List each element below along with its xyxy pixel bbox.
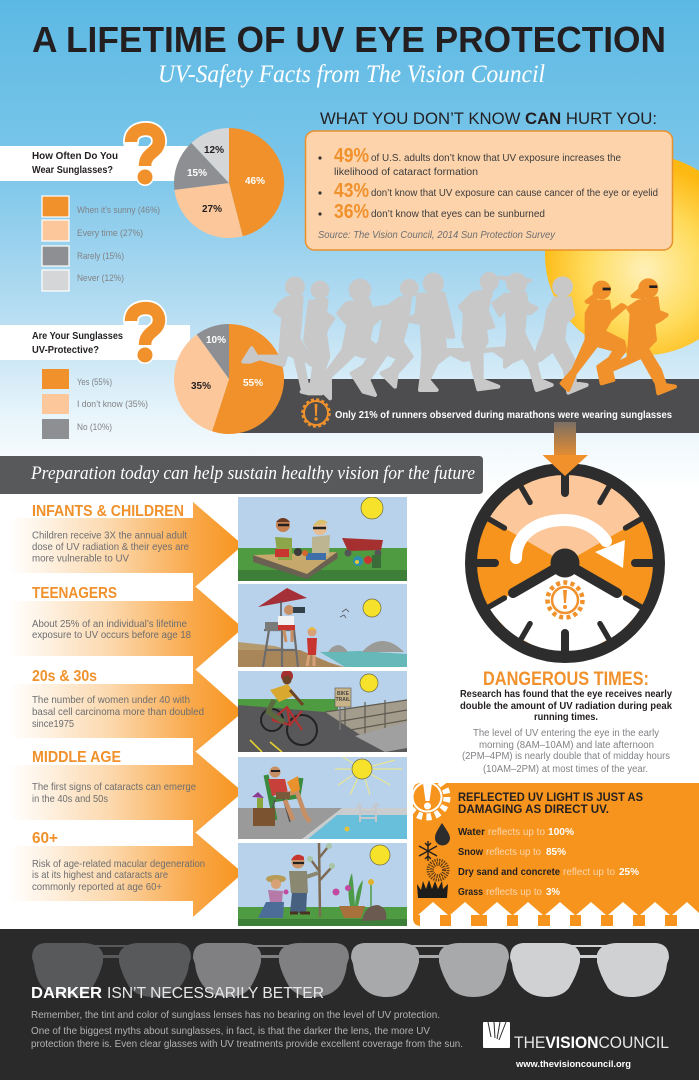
- panel: 20s & 30s: The number of women under 40 with: [32, 694, 190, 706]
- sunglasses row: [32, 943, 669, 997]
- pie chart: how often: 15%: [187, 168, 207, 179]
- up arrows: [418, 902, 699, 926]
- panel: 20s & 30s: basal cell carcinoma more than doubled: [32, 706, 204, 718]
- illustration: cyclist on bike trail: BIKE: [337, 691, 350, 697]
- fact: 49%: of U.S. adults don’t know that UV exposure increases the: [371, 152, 621, 164]
- clock chart: [471, 469, 659, 657]
- illustration: relaxing by pool: [238, 755, 407, 839]
- panel: how often question: Wear Sunglasses?: [32, 165, 113, 176]
- panel: middle age: The first signs of cataracts can emerge: [32, 781, 196, 793]
- panel: teenagers: About 25% of an individual’s lifetime: [32, 618, 187, 630]
- row: snow: 85%: [546, 847, 566, 858]
- panel: UV-protective question: UV-Protective?: [32, 345, 99, 356]
- heading: what you don't know: WHAT YOU DON’T KNOW CAN HURT YOU:: [320, 109, 657, 128]
- panel: teenagers: [0, 585, 243, 670]
- panel: how often question: How Often Do You: [32, 151, 118, 162]
- banner: preparation today: [0, 456, 483, 494]
- legend: how often: Rarely (15%): [77, 251, 124, 262]
- row: dry sand and concrete: reflect up to: [563, 867, 615, 878]
- row: dry sand and concrete: 25%: [619, 867, 639, 878]
- panel: infants & children: [0, 502, 243, 587]
- row: water: [435, 823, 574, 846]
- row: water: reflects up to: [488, 827, 545, 838]
- text: darker body: protection there is. Even clear glasses with UV treatments provide excellent coverage from the sun.: [31, 1039, 463, 1050]
- fact: 43%: don’t know that UV exposure can cause cancer of the eye or eyelid: [371, 187, 658, 199]
- fact: 49%: 49%: [334, 145, 369, 167]
- text: research finding: running times.: [534, 712, 598, 723]
- pie chart: UV-protective: 10%: [206, 335, 226, 346]
- text: level of UV: The level of UV entering the eye in the early: [473, 728, 659, 739]
- panel: 20s & 30s: 20s & 30s: [32, 668, 97, 685]
- text: level of UV: (2PM–4PM) is nearly double that of midday hours: [462, 751, 670, 762]
- icon: question mark: [131, 308, 159, 364]
- pie chart: UV-protective: [174, 324, 284, 434]
- text: darker body: One of the biggest myths about sunglasses, in fact, is that the darker the lens, the more UV: [31, 1026, 430, 1037]
- panel: footer: [0, 929, 699, 1080]
- pie chart: how often: 12%: [204, 145, 224, 156]
- illustration: couple gardening: [238, 843, 407, 926]
- fact: 36%: don’t know that eyes can be sunburned: [371, 208, 545, 220]
- icon: warning burst: [413, 783, 450, 820]
- panel: middle age: MIDDLE AGE: [32, 749, 121, 766]
- row: snow: Snow: [458, 847, 483, 858]
- banner: preparation today: Preparation today can help sustain healthy vision for the future: [30, 463, 475, 484]
- text: research finding: Research has found that the eye receives nearly: [460, 689, 672, 700]
- panel: 20s & 30s: [0, 668, 243, 752]
- heading: dangerous times: DANGEROUS TIMES:: [483, 669, 649, 690]
- pie chart: UV-protective: 55%: [243, 378, 263, 389]
- text: darker body: [31, 1010, 463, 1050]
- panel: survey facts: [306, 131, 672, 250]
- fact: 49%: likelihood of cataract formation: [334, 166, 478, 178]
- panel: infants & children: more vulnerable to UV: [32, 552, 129, 564]
- pie chart: how often: 27%: [202, 204, 222, 215]
- text: level of UV: morning (8AM–10AM) and late afternoon: [479, 740, 654, 751]
- pie chart: UV-protective: 35%: [191, 381, 211, 392]
- legend: UV-protective: No (10%): [77, 422, 112, 433]
- panel: UV-protective question: [0, 308, 190, 364]
- row: dry sand and concrete: Dry sand and concrete: [458, 867, 560, 878]
- panel: infants & children: INFANTS & CHILDREN: [32, 503, 184, 520]
- illustration: cyclist on bike trail: TRAIL: [336, 697, 350, 703]
- row: grass: [417, 880, 560, 898]
- panel: how often question: [0, 129, 190, 186]
- panel: reflected UV: [407, 777, 699, 926]
- fact: 36%: 36%: [334, 201, 369, 223]
- text: level of UV: [462, 728, 670, 775]
- heading: darker: DARKER: [31, 985, 102, 1002]
- row: dry sand and concrete: [428, 860, 639, 880]
- sky background: [0, 0, 699, 490]
- heading: reflected: [458, 792, 643, 816]
- illustration: lifeguard on beach: [238, 584, 407, 667]
- legend: UV-protective: [42, 369, 148, 439]
- illustration: cyclist on bike trail: [238, 670, 407, 752]
- title: A LIFETIME OF UV EYE PROTECTION: [32, 19, 666, 60]
- pie chart: how often: [174, 128, 284, 238]
- fact: 43%: [334, 180, 658, 202]
- text: research finding: [460, 689, 672, 723]
- subtitle: UV-Safety Facts from The Vision Council: [158, 61, 545, 88]
- panel: 60+: [0, 830, 243, 917]
- legend: how often: Every time (27%): [77, 228, 143, 239]
- row: grass: Grass: [458, 887, 483, 898]
- legend: UV-protective: I don’t know (35%): [77, 399, 148, 410]
- clock sector: night white: [487, 563, 643, 653]
- legend: UV-protective: Yes (55%): [77, 377, 112, 388]
- pie chart: how often: 46%: [245, 176, 265, 187]
- clock sector: midday peach: [487, 473, 643, 563]
- panel: 60+: 60+: [32, 830, 58, 847]
- sunglasses: medium: [351, 943, 509, 997]
- row: grass: reflects up to: [486, 887, 542, 898]
- sun: [545, 155, 699, 355]
- sunglasses: darkest: [32, 943, 191, 997]
- row: snow: [419, 841, 566, 861]
- text: level of UV: (10AM–2PM) at most times of the year.: [483, 764, 648, 775]
- road band: [229, 379, 699, 433]
- panel: infants & children: Children receive 3X the annual adult: [32, 530, 187, 542]
- runners without sunglasses: [243, 274, 587, 398]
- text: darker body: Remember, the tint and color of sunglass lenses has no bearing on the level of UV protection.: [31, 1010, 440, 1021]
- arrow: clockwise: [516, 520, 625, 568]
- fact: 43%: 43%: [334, 180, 369, 202]
- illustration: children in sandbox: [238, 497, 407, 581]
- heading: reflected: DAMAGING AS DIRECT UV.: [458, 804, 609, 816]
- sunglasses: light: [510, 943, 669, 997]
- heading: darker: ISN’T NECESSARILY BETTER: [107, 985, 324, 1002]
- legend: how often: When it’s sunny (46%): [77, 205, 160, 216]
- logo: The Vision Council: [483, 1022, 669, 1052]
- fact: 36%: [334, 201, 545, 223]
- row: snow: reflects up to: [486, 847, 541, 858]
- panel: 60+: is at its highest and cataracts are: [32, 869, 168, 881]
- heading: reflected: REFLECTED UV LIGHT IS JUST AS: [458, 792, 643, 804]
- panel: 20s & 30s: since1975: [32, 718, 74, 730]
- panel: 60+: commonly reported at age 60+: [32, 881, 162, 893]
- legend: how often: [42, 196, 160, 291]
- panel: 60+: Risk of age-related macular degeneration: [32, 858, 205, 870]
- caption: runners: Only 21% of runners observed during marathons were wearing sunglasses: [335, 410, 672, 421]
- runners with sunglasses: [562, 280, 675, 393]
- logo: The Vision Council: THEVISIONCOUNCIL: [514, 1033, 669, 1052]
- icon: warning sun: [548, 582, 582, 618]
- panel: infants & children: dose of UV radiation & their eyes are: [32, 541, 189, 553]
- panel: teenagers: exposure to UV occurs before age 18: [32, 629, 191, 641]
- fact: 49%: [334, 145, 621, 178]
- panel: teenagers: TEENAGERS: [32, 585, 117, 602]
- panel: UV-protective question: Are Your Sunglasses: [32, 331, 123, 342]
- icon: question mark: [131, 129, 159, 186]
- row: grass: 3%: [546, 887, 560, 898]
- row: water: Water: [458, 827, 485, 838]
- sunglasses: dark: [193, 943, 349, 997]
- arrow: to clock: [542, 422, 588, 476]
- text: research finding: double the amount of UV radiation during peak: [460, 701, 672, 712]
- source: Source: The Vision Council, 2014 Sun Protection Survey: [318, 230, 556, 241]
- panel: middle age: in the 40s and 50s: [32, 793, 108, 805]
- row: water: 100%: [548, 827, 574, 838]
- panel: middle age: [0, 749, 243, 833]
- legend: how often: Never (12%): [77, 273, 124, 284]
- icon: warning gear: [302, 400, 330, 426]
- url: www.thevisioncouncil.org: [515, 1059, 631, 1069]
